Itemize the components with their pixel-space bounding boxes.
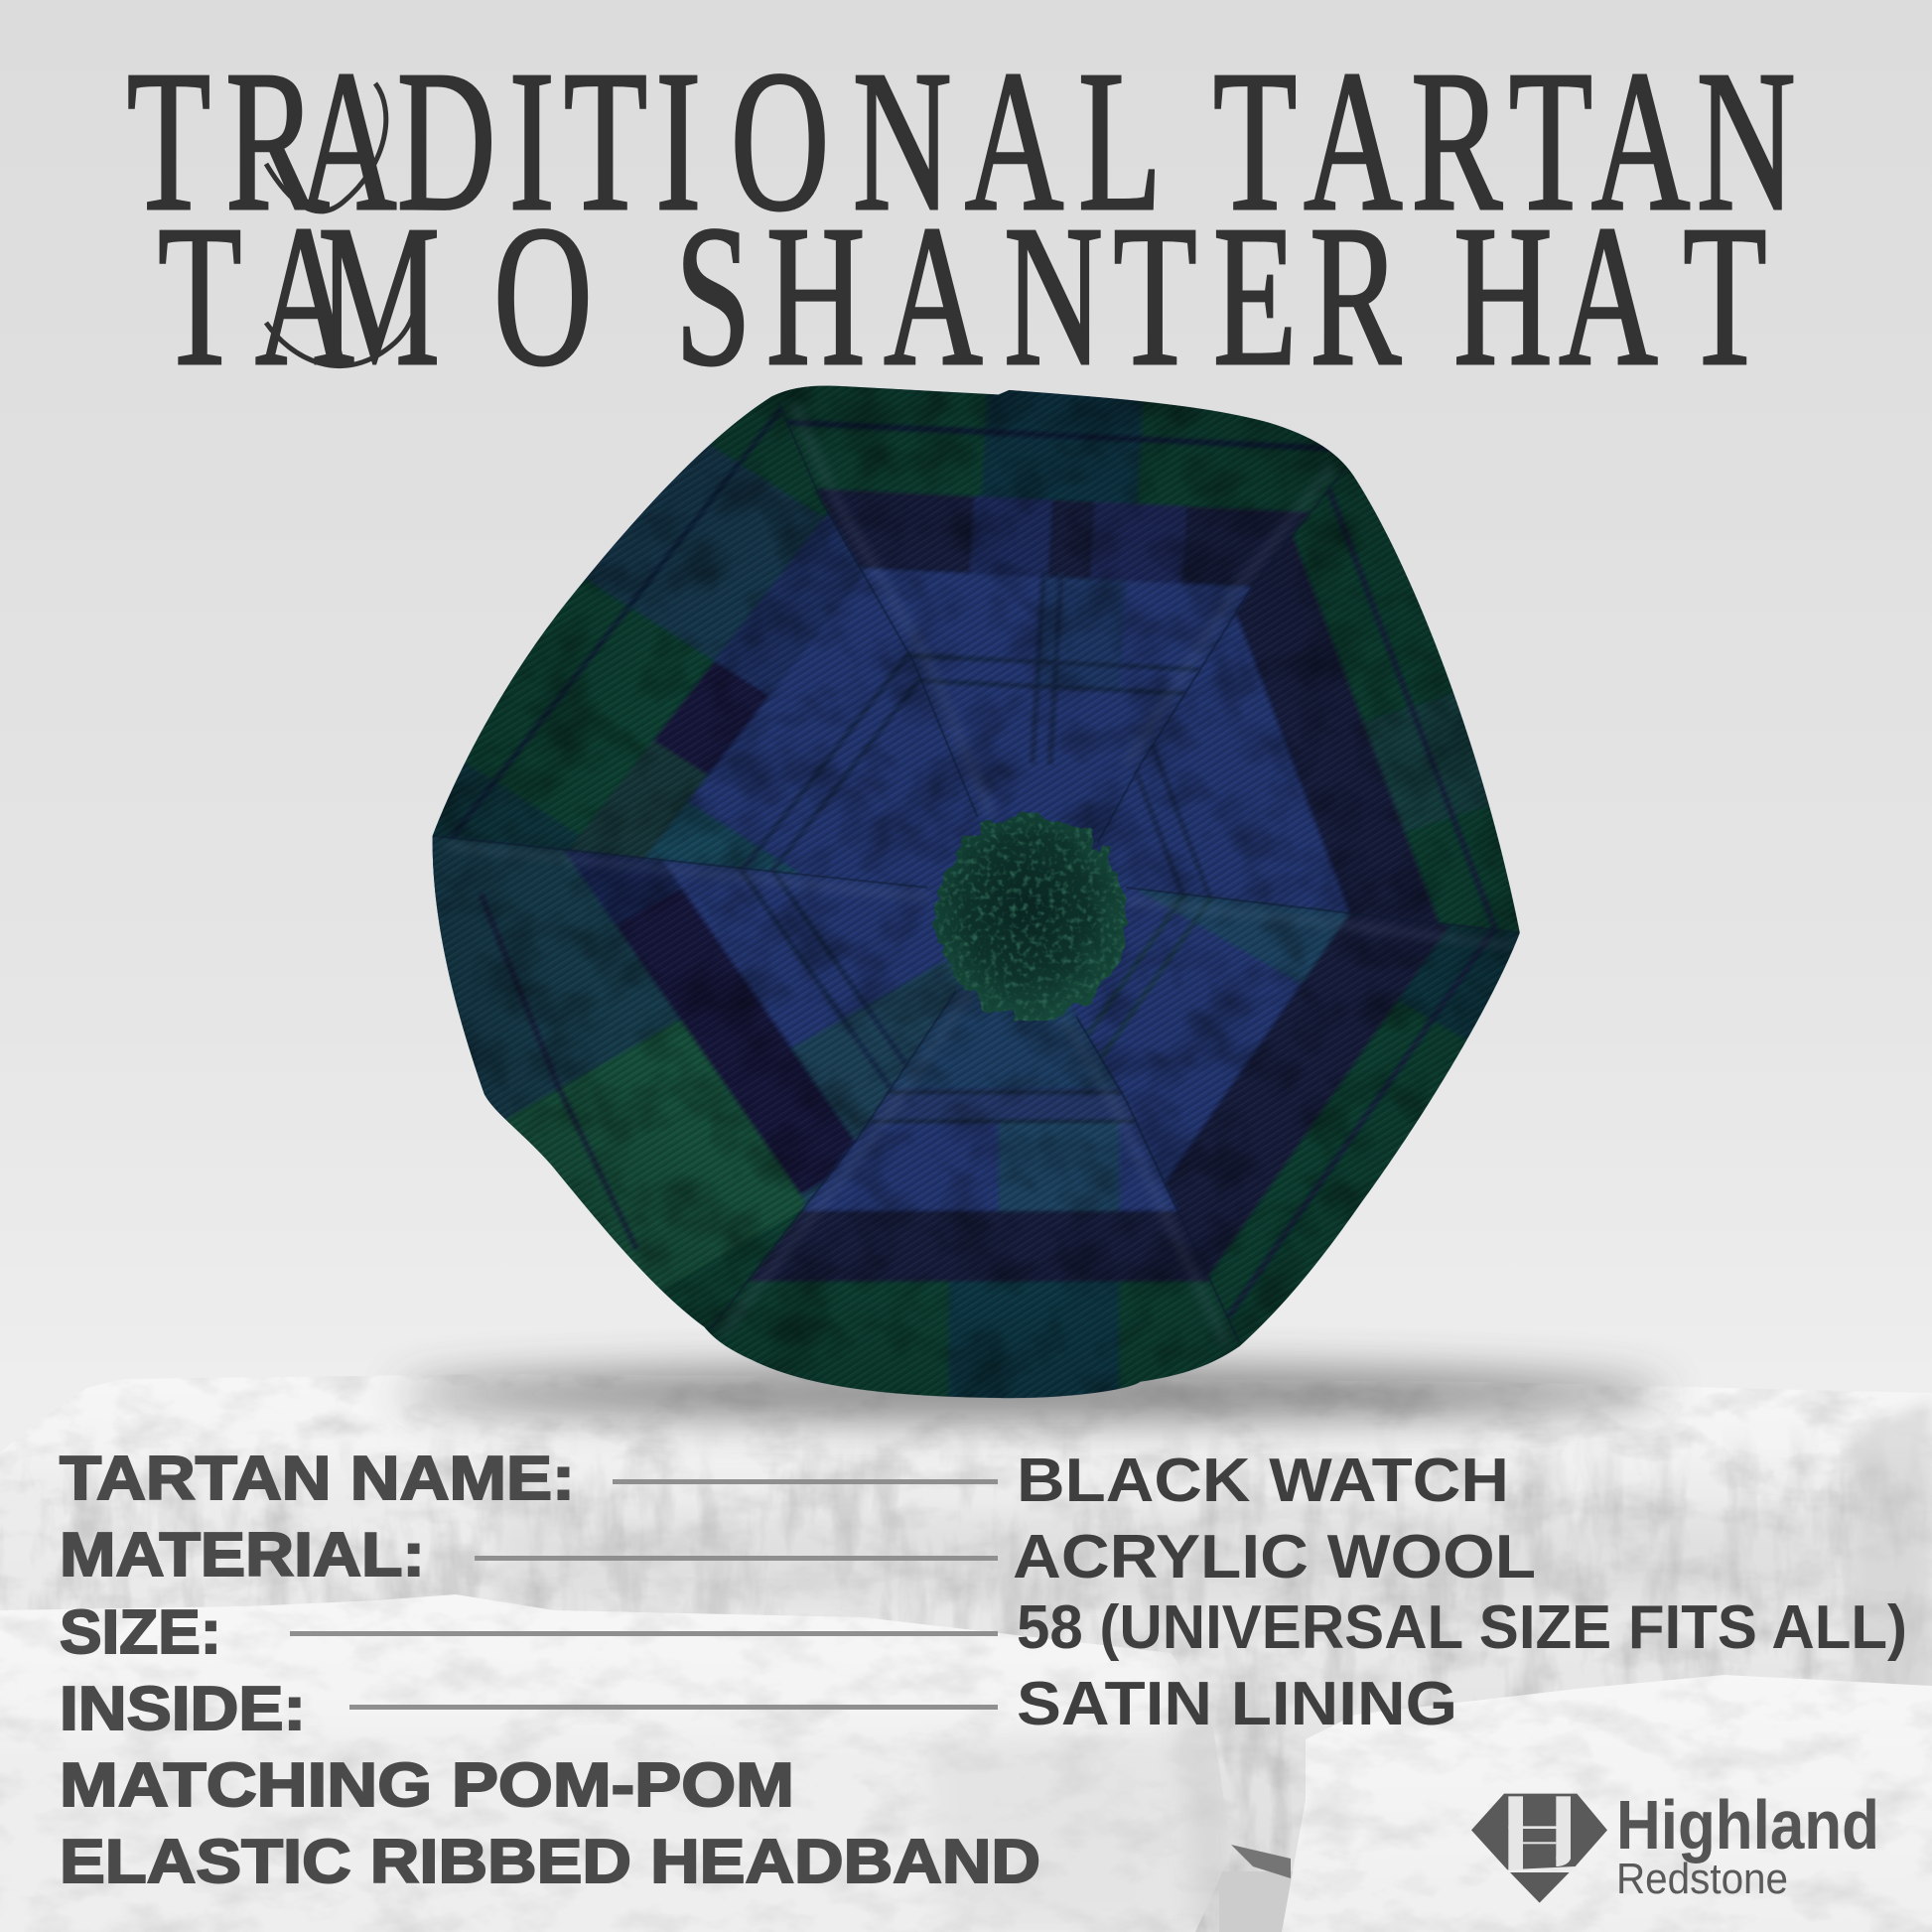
logo: Highland Redstone: Redstone bbox=[1616, 1855, 1788, 1903]
spec: size: 58 (UNIVERSAL SIZE FITS ALL) bbox=[1017, 1593, 1907, 1662]
panel: lower left bbox=[433, 834, 962, 1333]
icon: pom-pom bbox=[935, 813, 1126, 1020]
fabric twill weave bbox=[481, 467, 1464, 1395]
spec: material: ACRYLIC WOOL bbox=[1013, 1523, 1536, 1591]
outer plaid line, lower left bbox=[481, 894, 636, 1249]
logo: Highland Redstone bbox=[1471, 1786, 1879, 1903]
spec: size bbox=[60, 1593, 1907, 1667]
tartan tam o shanter hat bbox=[433, 385, 1520, 1398]
panel: upper right bbox=[1092, 467, 1520, 934]
title: TRADITIONAL TARTAN bbox=[127, 29, 1796, 252]
gap between rocks bbox=[1219, 1845, 1299, 1932]
spec: material: MATERIAL: bbox=[60, 1521, 425, 1589]
logo: Highland Redstone: Highland bbox=[1616, 1786, 1879, 1863]
spec: tartan name: BLACK WATCH bbox=[1017, 1447, 1509, 1515]
panel: top bbox=[771, 385, 1348, 849]
spec: tartan name bbox=[60, 1445, 1509, 1515]
spec: inside bbox=[60, 1670, 1457, 1743]
feature: elastic ribbed headband: ELASTIC RIBBED HEADBAND bbox=[60, 1828, 1040, 1896]
hat fold highlights bbox=[446, 403, 1513, 1343]
spec: inside: INSIDE: bbox=[60, 1675, 306, 1743]
front left stone bbox=[0, 1588, 1241, 1932]
spec: inside: SATIN LINING bbox=[1017, 1670, 1457, 1738]
fabric mottling bbox=[441, 387, 1517, 1398]
feature: matching pom-pom: MATCHING POM-POM bbox=[60, 1751, 794, 1820]
title: TAM O SHANTER HAT bbox=[158, 184, 1767, 407]
panel: upper left bbox=[433, 395, 981, 892]
panel: lower right bbox=[1070, 887, 1520, 1346]
title bbox=[127, 29, 1796, 407]
back stone plinth bbox=[0, 1370, 1932, 1932]
spec: tartan name: TARTAN NAME: bbox=[60, 1445, 575, 1513]
specification list bbox=[60, 1445, 1907, 1896]
spec: material bbox=[60, 1521, 1536, 1591]
spec: size: SIZE: bbox=[60, 1598, 221, 1667]
front right stone bbox=[1271, 1668, 1932, 1932]
hat shadow on plinth bbox=[397, 1368, 1668, 1420]
icon: diamond monogram bbox=[1471, 1794, 1607, 1903]
panel: bottom bbox=[708, 985, 1241, 1398]
hat seams bbox=[433, 403, 1520, 1343]
hat edge shading bbox=[417, 377, 1530, 1404]
